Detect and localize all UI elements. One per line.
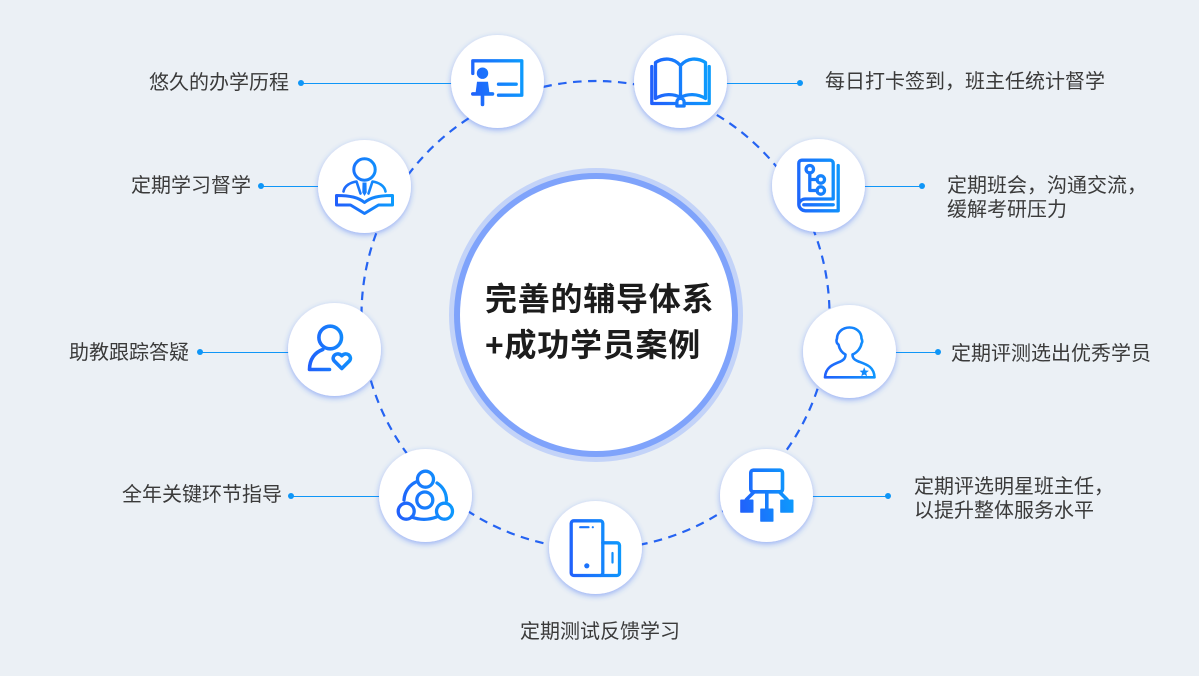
- central circle: [449, 168, 743, 462]
- label: 定期班会: 缓解考研压力: [947, 198, 1067, 221]
- label: 定期班会: [947, 174, 1147, 221]
- label: 定期班会: 定期班会，沟通交流，: [947, 174, 1147, 197]
- node: three people circle icon: [379, 449, 472, 542]
- central title: [485, 281, 714, 363]
- label: 定期学习督学: 定期学习督学: [131, 174, 251, 197]
- node: mentor with book icon: [318, 140, 411, 233]
- connector: 定期班会: [864, 183, 925, 189]
- label: 定期评选明星班主任: [914, 475, 1114, 522]
- central title: 完善的辅导体系: [485, 281, 714, 317]
- node: person with heart icon: [288, 303, 381, 396]
- label: 定期评选明星班主任: 定期评选明星班主任，: [914, 475, 1114, 498]
- label: 全年关键环节指导: 全年关键环节指导: [122, 483, 282, 506]
- label: 定期评测选出优秀学员: 定期评测选出优秀学员: [951, 342, 1151, 365]
- node: teacher at board icon: [451, 35, 544, 128]
- connector: 助教跟踪答疑: [197, 349, 289, 355]
- dashed orbit ring: [362, 81, 830, 549]
- label: 定期测试反馈学习: 定期测试反馈学习: [520, 620, 680, 643]
- node: open book icon: [634, 35, 727, 128]
- central title: +成功学员案例: [485, 327, 701, 363]
- connector: 定期评测: [895, 349, 941, 355]
- label: 助教跟踪答疑: 助教跟踪答疑: [69, 341, 189, 364]
- connector: 每日打卡: [726, 80, 803, 86]
- connector: 定期学习督学: [258, 183, 319, 189]
- node: hierarchy chart icon: [720, 449, 813, 542]
- node: book with tree icon: [772, 139, 865, 232]
- connector: 定期评选: [812, 493, 891, 499]
- label: 定期评选明星班主任: 以提升整体服务水平: [914, 499, 1094, 522]
- node: phone and tablet icon: [549, 501, 642, 594]
- connector: 全年关键环节指导: [288, 493, 380, 499]
- connector: 悠久的办学历程: [298, 80, 452, 86]
- label: 悠久的办学历程: 悠久的办学历程: [149, 71, 289, 94]
- node: person with star icon: [803, 305, 896, 398]
- label: 每日打卡签到: 每日打卡签到，班主任统计督学: [825, 70, 1105, 93]
